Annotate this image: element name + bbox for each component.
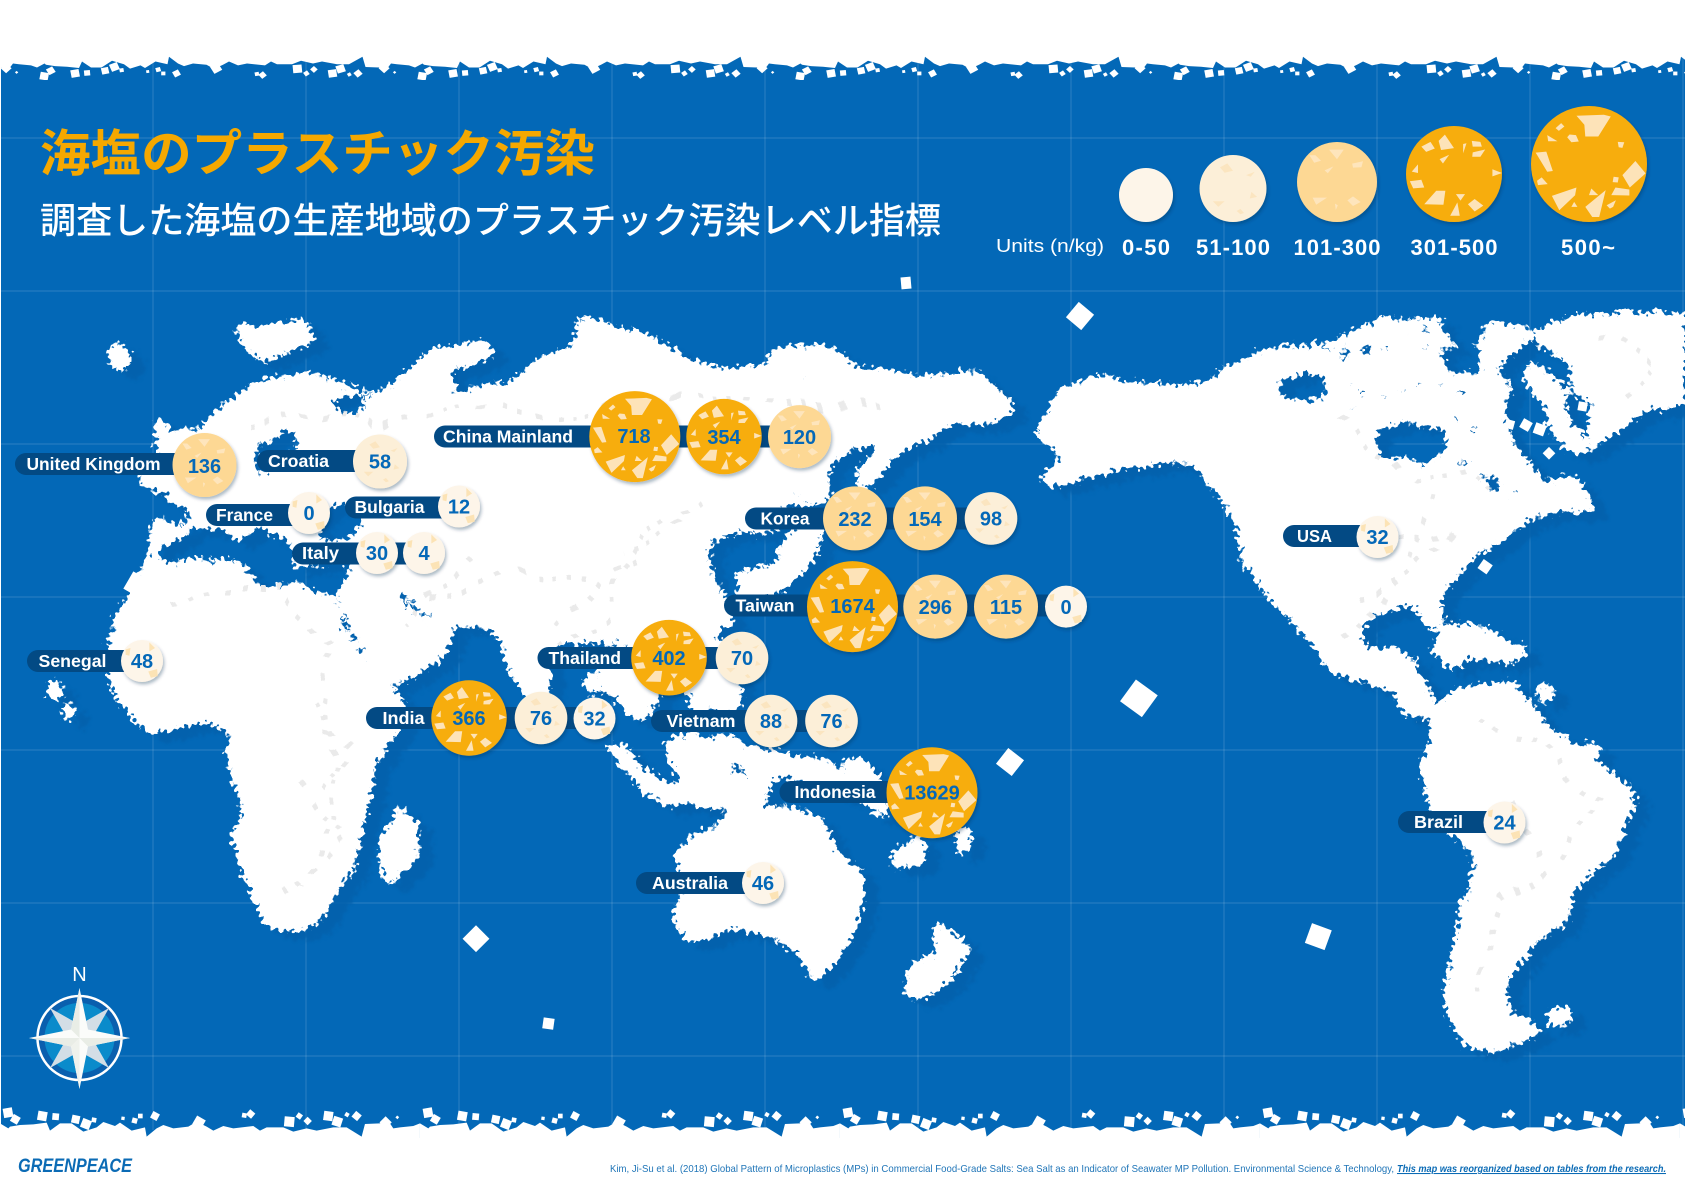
value: 48: 48 [131,651,153,673]
logo: Greenpeace: GREENPEACE [18,1156,133,1177]
legend item: 500~: 500~ [1561,235,1615,260]
value: 154: 154 [908,509,943,531]
sea: Mediterranean [160,530,345,590]
row: Taiwan [724,561,1087,652]
island: Iceland [112,345,127,372]
sea: Gulf of Thailand [665,684,688,706]
sea: Gulf of Aden [377,680,425,692]
row: Senegal [27,640,163,682]
value: 32 [574,698,616,740]
value: 120 [768,405,831,468]
legend label: Units: Units (n/kg) [996,235,1104,256]
row: Croatia [257,434,407,488]
island: Sri Lanka [585,676,600,692]
islands: Atlantic [49,424,166,720]
island: Baffin [1527,363,1590,452]
value: 1674: 1674 [830,596,876,618]
legend item: 500~ [1531,106,1647,260]
islands: Sumatra [608,745,675,802]
subtitle: 調査した海塩の生産地域のプラスチック汚染レベル指標 [40,200,941,241]
islands: Cuba and the Caribbean [1432,625,1555,700]
value: 136 [172,433,236,497]
sea: Hudson Bay [1380,427,1440,462]
row: China Mainland [434,391,831,482]
island: Svalbard [236,325,310,358]
value: 366: 366 [452,708,486,730]
peninsula: Kamchatka [858,440,913,488]
row: Brazil [1398,802,1526,844]
sea: Red Sea [333,600,377,680]
value: 402: 402 [652,648,686,670]
sea: Foxe Basin [1283,327,1477,397]
value: 232: 232 [838,509,872,531]
value: 30 [356,532,398,574]
row: Bulgaria [345,486,480,528]
continent: Australia [677,807,860,978]
row: Thailand [538,620,768,696]
island group: Korea and Japan [740,520,820,595]
value: 98: 98 [980,508,1002,530]
row: India [366,680,616,756]
compass rose: N [72,964,87,986]
islands: Pacific east of Australia [892,830,972,867]
row: Thailand: Thailand [548,648,621,668]
row: Australia: Australia [652,873,728,893]
value: 70: 70 [731,648,753,670]
value: 32: 32 [583,708,606,730]
row: Indonesia [780,747,978,838]
value: 402 [631,620,707,696]
island: Greenland [1530,315,1685,445]
row: France: France [216,505,273,525]
sea: Persian Gulf [398,593,432,625]
value: 88: 88 [760,711,782,733]
legend item: 0-50: 0-50 [1122,235,1170,260]
legend item: 51-100 [1196,155,1270,260]
row: Senegal: Senegal [38,651,106,671]
value: 718 [589,391,680,482]
value: 296: 296 [919,597,952,619]
value: 0: 0 [1060,597,1072,619]
value: 232 [823,486,887,550]
value: 154 [893,486,957,550]
value: 4 [403,532,445,574]
value: 1674 [807,561,898,652]
legend item: 301-500: 301-500 [1410,235,1498,260]
sea: White Sea [340,395,360,415]
island: Madagascar [380,810,417,880]
row: Italy: Italy [302,543,339,563]
row: USA: USA [1297,526,1332,546]
value: 98 [965,492,1017,545]
value: 24: 24 [1493,812,1516,834]
salt crust: top edge [0,0,1685,80]
row: Vietnam [651,695,858,747]
sea: Black Sea [321,507,361,537]
peninsula: Indochina [603,640,740,720]
row: Australia [636,862,784,904]
continent: South America [1424,683,1633,1049]
value: 46: 46 [752,873,774,895]
row: France [206,492,330,534]
islands: Borneo and Java [665,735,770,808]
continent: North America [1037,320,1540,718]
scattered salt crystals in the ocean [123,277,1588,1030]
value: 136: 136 [188,456,221,478]
sea: Baltic [258,433,296,472]
salt crust: bottom edge [0,1104,1685,1191]
value: 32: 32 [1366,527,1389,549]
land: white salt continents [49,315,1685,1049]
legend item: 51-100: 51-100 [1196,235,1270,260]
value: 115: 115 [990,597,1022,619]
row: Croatia: Croatia [268,451,329,471]
legend item: 101-300 [1294,142,1380,260]
value: 4: 4 [418,543,430,565]
row: Bulgaria: Bulgaria [354,497,425,517]
legend item: 101-300: 101-300 [1294,235,1380,260]
row: USA [1283,516,1398,558]
row: India: India [382,708,425,728]
title: 海塩のプラスチック汚染 [40,126,595,182]
row: United Kingdom [15,433,236,497]
value: 0 [1045,586,1087,628]
island: New Zealand [905,925,968,995]
row: Korea [745,486,1017,550]
value: 70 [716,632,768,684]
compass rose [29,964,130,1089]
value: 76 [515,692,567,744]
value: 13629: 13629 [904,782,960,804]
value: 76: 76 [530,708,552,730]
row: Korea: Korea [760,508,810,528]
row: Brazil: Brazil [1414,812,1463,832]
islands: South Atlantic [1548,740,1600,1022]
legend item: 301-500 [1406,126,1502,260]
value: 115 [974,575,1038,639]
row: Vietnam: Vietnam [666,711,736,731]
island: New Guinea [770,752,890,815]
value: 76: 76 [820,711,843,733]
value: 58 [353,434,407,488]
legend: units [996,106,1647,260]
value: 120: 120 [783,427,816,449]
value: 88 [745,695,797,747]
value: 12: 12 [448,496,470,518]
value: 366 [431,680,507,756]
value: 46 [742,862,784,904]
row: China Mainland: China Mainland [443,426,573,446]
value: 0: 0 [303,503,315,525]
value: 354 [686,399,762,474]
channels: Canadian Arctic [1300,330,1520,510]
row: Italy [292,532,445,574]
grey salt speckles on land [170,340,1660,990]
value: 30: 30 [366,543,388,565]
legend item: 0-50 [1119,168,1173,260]
row: United Kingdom: United Kingdom [26,454,160,474]
value: 718: 718 [617,426,651,448]
value: 13629 [886,747,978,838]
channels: Southeast Asia [640,730,850,790]
source citation: Kim, Ji-Su et al. (2018) Global Pattern of Microplastics (MPs) in Commercial Food-Grade Salts: Sea Salt as an Indicator of Seawater MP Pollution. Environmental Science & Technology, [610,1163,1394,1175]
value: 354: 354 [707,427,742,449]
channels: northern Eurasia [180,375,900,520]
row: Taiwan: Taiwan [736,596,794,616]
continent: Europe, Asia and Africa [113,319,1013,930]
value: 58: 58 [369,452,391,474]
sea: Bay of Biscay [168,507,186,522]
row: Indonesia: Indonesia [794,782,876,802]
island: Newfoundland [1530,478,1590,515]
value: 76 [805,695,858,747]
sea: Yellow Sea pocket [762,540,775,562]
value: 296 [903,575,967,639]
